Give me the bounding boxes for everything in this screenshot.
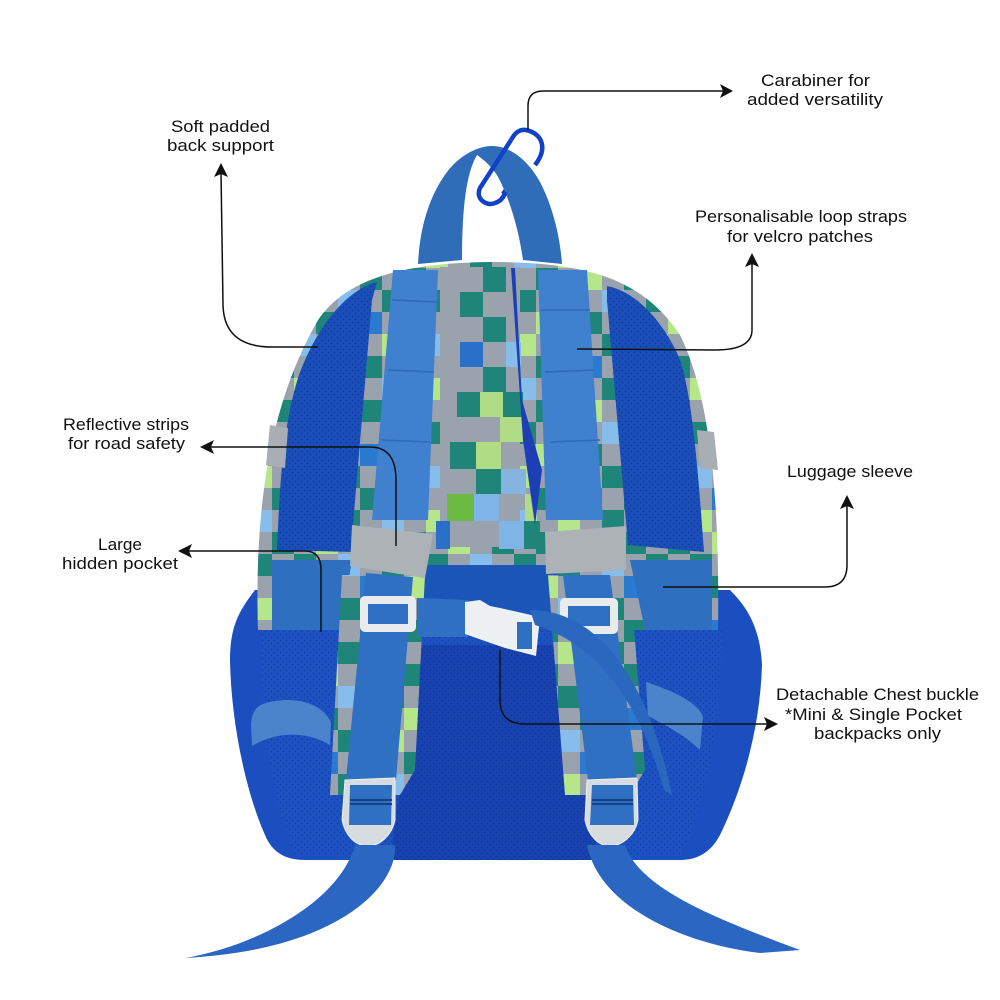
arrowheads [178, 84, 854, 731]
label: hidden pocket: hidden pocket [62, 555, 178, 573]
center checker [436, 267, 542, 549]
label: reflective strips: Reflective strips [63, 416, 189, 434]
label: reflective strips: for road safety [68, 435, 186, 453]
label: carabiner [747, 72, 884, 109]
checker body [257, 262, 718, 630]
carabiner back [503, 130, 542, 194]
lower center panel [400, 565, 575, 860]
label: hidden pocket [62, 536, 178, 573]
callout lines [188, 91, 847, 724]
label: loop straps: for velcro patches [727, 228, 873, 246]
label: chest buckle: backpacks only [814, 725, 942, 743]
reflective side strips [266, 425, 718, 470]
left shoulder strap [372, 270, 438, 520]
center buckle [465, 600, 540, 656]
label: soft padded back support: back support [167, 137, 274, 155]
label: soft padded back support [167, 118, 274, 155]
side pockets [230, 590, 762, 860]
back padding mesh right [607, 286, 704, 552]
label: soft padded back support: Soft padded [171, 118, 270, 136]
side tab left [251, 700, 331, 746]
pocket mesh [262, 630, 722, 856]
label: chest buckle: *Mini & Single Pocket [785, 706, 962, 724]
label: luggage sleeve: Luggage sleeve [787, 463, 913, 481]
label: carabiner: Carabiner for [761, 72, 871, 90]
lower straps [346, 573, 637, 780]
chest strap [417, 598, 468, 637]
left slider [360, 596, 416, 632]
label: loop straps [695, 208, 907, 246]
lower strap adjusters [342, 778, 638, 846]
center mesh [390, 645, 598, 860]
top handle [418, 146, 562, 264]
right shoulder strap [538, 270, 603, 520]
chest strap tail [530, 610, 672, 795]
label: chest buckle: Detachable Chest buckle [776, 686, 979, 704]
side tab right [646, 682, 703, 750]
tail straps [185, 845, 800, 958]
label: loop straps: Personalisable loop straps [695, 208, 907, 226]
label: hidden pocket: Large [98, 536, 142, 554]
strap stitching [382, 300, 600, 442]
right slider [560, 598, 618, 634]
label: carabiner: added versatility [747, 91, 884, 109]
luggage sleeve [272, 560, 712, 632]
label: reflective strips [63, 416, 189, 453]
left reflective strip [350, 525, 433, 578]
label: chest buckle [776, 686, 979, 743]
backpack illustration [185, 130, 800, 958]
carabiner front [479, 140, 511, 204]
right reflective strip [545, 526, 626, 574]
checker edging under straps [330, 575, 645, 795]
back padding mesh left [277, 282, 377, 552]
